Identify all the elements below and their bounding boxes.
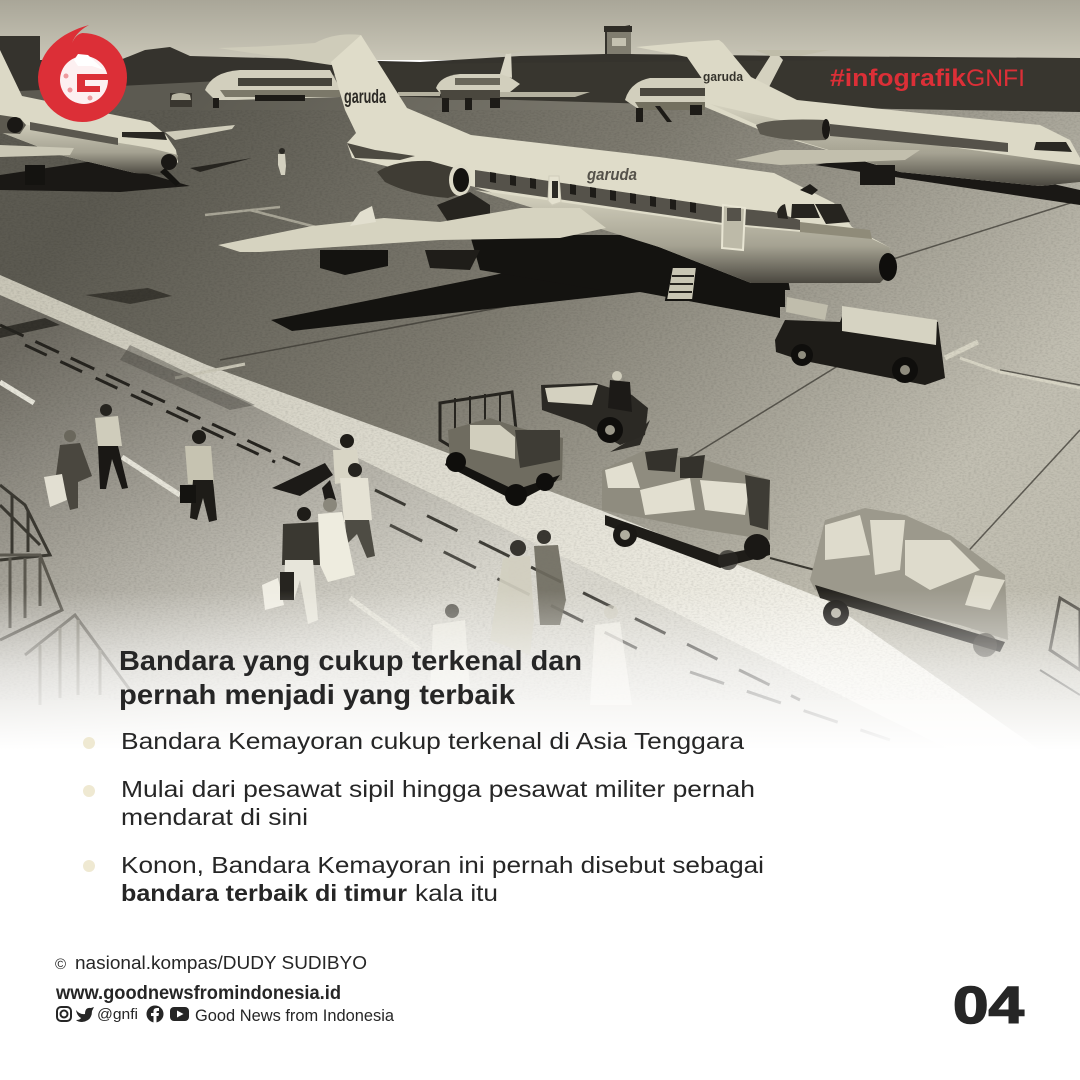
baggage cart 2: [602, 448, 770, 570]
airplane: rear centre: [398, 50, 590, 112]
women in dresses: [490, 530, 566, 655]
baggage tractor: [541, 371, 650, 452]
social media row: [57, 1006, 395, 1025]
bullet 2: mendarat di sini: [121, 804, 308, 830]
main Garuda airplane: garuda: [586, 165, 637, 184]
cockpit windows: [777, 204, 850, 224]
bullet 2: [83, 776, 755, 830]
passenger far left with bag: [44, 430, 92, 510]
photo: airport apron with Garuda aircraft: [0, 0, 1080, 750]
baggage cart 1: [440, 392, 563, 506]
fin and fuselage: [331, 35, 896, 283]
apron: [0, 72, 1080, 750]
road markings: [0, 325, 300, 465]
sky: [0, 0, 1080, 60]
heading: pernah menjadi yang terbaik: [119, 679, 515, 710]
wing: [218, 208, 606, 252]
couple walking: [262, 498, 355, 624]
main Garuda airplane: [218, 34, 897, 331]
hashtag: #infografikGNFI: #infografik: [830, 65, 967, 92]
bullet 1: Bandara Kemayoran cukup terkenal di Asia Tenggara: [121, 728, 744, 754]
road: [0, 295, 950, 750]
heading: [119, 645, 582, 710]
front door: [722, 205, 745, 250]
yellow-line shadow mat: [272, 463, 333, 496]
icon: twitter: [76, 1007, 94, 1022]
lower fuselage: [475, 190, 896, 283]
engine: [377, 161, 470, 198]
bullet list: [83, 728, 764, 906]
airplane: rear far left: [170, 70, 340, 108]
shadow: [271, 240, 780, 331]
icon: youtube: [170, 1007, 189, 1021]
passengers group: [44, 404, 632, 705]
airport tug vehicle: [775, 297, 945, 385]
cabin door: [548, 176, 561, 205]
person far on apron: [278, 148, 286, 175]
page number: 04: [953, 977, 1024, 1035]
hashtag: #infografikGNFI: [830, 65, 1025, 92]
brand name: Good News from Indonesia: [195, 1006, 395, 1025]
airplane: right: garuda: [703, 69, 744, 84]
baggage cart edge right: [1040, 598, 1080, 695]
bullet 3: bandara terbaik di timur: [121, 880, 407, 906]
airplane: left: [0, 50, 252, 192]
airplane: right: [636, 40, 1080, 205]
airport horizon buildings: [0, 25, 1080, 110]
website url: www.goodnewsfromindonesia.id: [55, 983, 341, 1004]
garuda livery: garuda: [344, 87, 386, 108]
airplane: rear right small: [625, 78, 712, 122]
passenger boarding railings: [0, 485, 130, 705]
icon: instagram: [57, 1007, 71, 1021]
bullet 3: kala itu: [415, 880, 498, 906]
photo credit: ©: [55, 956, 66, 973]
baggage cart 3: [770, 508, 1008, 657]
apron joints: [220, 200, 1080, 560]
passenger 2: [95, 404, 128, 489]
pylon/gear: [437, 192, 490, 225]
passenger 3 with case: [180, 430, 217, 522]
bullet 2: Mulai dari pesawat sipil hingga pesawat militer pernah: [121, 776, 755, 802]
handle: @gnfi: [97, 1006, 138, 1023]
wheels: [320, 250, 388, 275]
logo: GNFI: [38, 25, 127, 122]
photo credit: nasional.kompas/DUDY SUDIBYO: [75, 953, 367, 973]
passengers in white near title: [430, 604, 632, 705]
heading: Bandara yang cukup terkenal dan: [119, 645, 582, 676]
window band: [475, 170, 800, 230]
hashtag: #infografikGNFI: GNFI: [966, 65, 1025, 92]
light strip: [0, 275, 1040, 750]
passengers centre pair: [322, 434, 375, 558]
white fade over photo bottom: [0, 590, 1080, 750]
control tower: [604, 26, 632, 54]
icon: facebook: [146, 1006, 164, 1023]
bullet 3: Konon, Bandara Kemayoran ini pernah disebut sebagai: [121, 852, 764, 878]
bullet 3: [83, 852, 764, 906]
boarding stairs: [666, 267, 697, 300]
nose cone: [879, 253, 897, 281]
grain: [0, 110, 1080, 700]
tail plane: [218, 34, 372, 65]
tail cone: [347, 143, 415, 160]
